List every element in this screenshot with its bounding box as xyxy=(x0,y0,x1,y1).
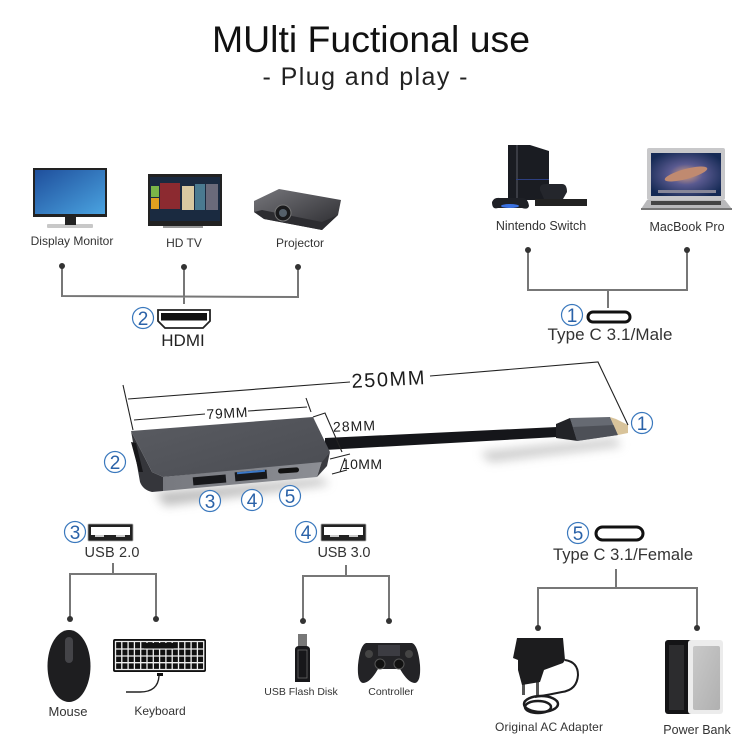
panel: USB 2.0 devices xyxy=(48,522,206,719)
label: Controller: Controller xyxy=(368,686,414,698)
cable xyxy=(325,427,557,450)
panel: HDMI devices xyxy=(31,168,341,350)
badge 1 on plug xyxy=(632,412,652,435)
connector: USB 3.0 lines xyxy=(300,565,392,624)
badge 2: 2 xyxy=(138,309,148,330)
badge 5 on hub: 5 xyxy=(285,487,295,508)
icon: mouse xyxy=(48,630,90,702)
label: Display Monitor: Display Monitor xyxy=(31,234,113,248)
badge 5 xyxy=(568,522,588,545)
badge 4 on hub: 4 xyxy=(247,491,258,512)
connector: HDMI lines xyxy=(59,263,301,304)
badge 1 xyxy=(562,304,582,327)
icon: USB flash disk xyxy=(295,634,310,682)
icon: USB 2.0 port xyxy=(88,524,133,541)
icon: USB 3.0 port xyxy=(321,524,366,541)
label: USB 3.0: USB 3.0 xyxy=(318,545,370,561)
panel: hub product xyxy=(104,362,652,513)
label: Type C 3.1/Male: Type C 3.1/Male xyxy=(548,325,672,344)
badge 3: 3 xyxy=(70,523,80,544)
label: Mouse: Mouse xyxy=(48,704,88,719)
icon: display monitor xyxy=(33,168,107,228)
badge 1: 1 xyxy=(567,306,577,327)
panel: USB 3.0 devices xyxy=(264,522,420,698)
label: Power Bank: Power Bank xyxy=(663,723,731,737)
title: MUlti Fuctional use xyxy=(212,19,530,60)
connector: USB 2.0 lines xyxy=(67,563,159,622)
dimension: 250MM xyxy=(123,362,628,430)
icon: game console xyxy=(492,145,587,209)
badge 2 on hub: 2 xyxy=(110,453,120,474)
panel: Type C female devices xyxy=(495,522,731,737)
shadow: plug xyxy=(480,438,622,462)
label: USB Flash Disk: USB Flash Disk xyxy=(264,686,339,698)
panel: Type C male devices xyxy=(492,145,732,344)
label: Keyboard: Keyboard xyxy=(134,704,186,718)
dimension: 28MM xyxy=(313,413,375,459)
label: Nintendo Switch: Nintendo Switch xyxy=(496,219,586,233)
icon: HD TV xyxy=(148,174,222,228)
badge 3 xyxy=(64,522,86,544)
shadow: hub xyxy=(155,478,330,506)
hub body xyxy=(131,417,330,492)
icon: power bank xyxy=(665,640,723,714)
badge 3 on hub xyxy=(200,490,220,513)
icon: HDMI port xyxy=(158,310,210,328)
label: HD TV: HD TV xyxy=(166,236,202,250)
connector: Type C male lines xyxy=(525,247,690,308)
connector: Type C female lines xyxy=(535,569,700,631)
dimension: 79MM xyxy=(134,398,311,422)
label: Original AC Adapter: Original AC Adapter xyxy=(495,720,603,734)
badge 2 xyxy=(132,308,154,330)
badge 3 on hub: 3 xyxy=(205,492,215,513)
icon: controller xyxy=(358,643,420,683)
badge 5: 5 xyxy=(573,524,583,545)
badge 4: 4 xyxy=(301,523,312,544)
badge 1 on plug: 1 xyxy=(637,414,647,435)
icon: Type C female port xyxy=(596,527,643,540)
icon: laptop xyxy=(641,148,732,210)
subtitle: - Plug and play - xyxy=(262,63,468,91)
dimension: 250MM: 250MM xyxy=(351,367,425,393)
dimension: 10MM: 10MM xyxy=(342,456,382,472)
label: HDMI: HDMI xyxy=(161,331,205,350)
badge 4 xyxy=(296,522,316,544)
icon: projector xyxy=(254,189,341,230)
label: MacBook Pro: MacBook Pro xyxy=(649,220,725,234)
icon: keyboard xyxy=(113,639,206,692)
label: USB 2.0: USB 2.0 xyxy=(84,545,140,561)
icon: Type C male port xyxy=(588,312,630,322)
badge 2 on hub xyxy=(104,452,126,474)
badge 4 on hub xyxy=(242,490,262,512)
badge 5 on hub xyxy=(280,486,300,508)
label: Projector: Projector xyxy=(276,236,324,250)
label: Type C 3.1/Female: Type C 3.1/Female xyxy=(553,546,693,564)
USB-C plug xyxy=(556,417,628,441)
dimension: 79MM: 79MM xyxy=(206,404,248,422)
dimension: 28MM: 28MM xyxy=(333,417,375,435)
icon: AC adapter xyxy=(513,638,578,713)
